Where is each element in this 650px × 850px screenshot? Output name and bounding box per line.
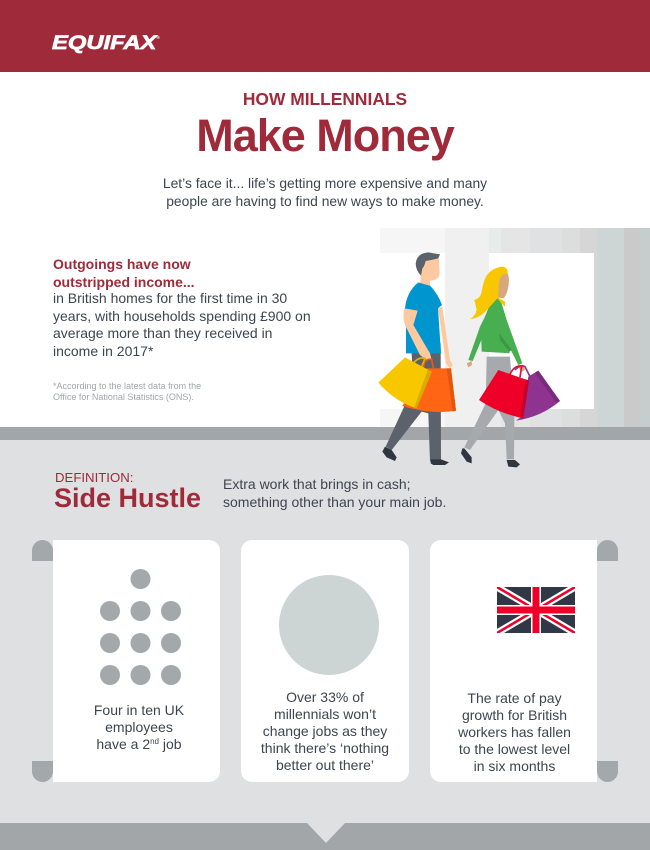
callout body: years, with households spending £900 on bbox=[53, 308, 311, 324]
footnote bbox=[53, 381, 201, 402]
dot icons bbox=[100, 569, 181, 685]
callout body: in British homes for the first time in 30 bbox=[53, 290, 287, 306]
callout text: outgoings bbox=[53, 256, 311, 359]
stat text: in six months bbox=[474, 758, 555, 774]
stat text: have a 2nd job bbox=[96, 736, 182, 752]
tab bottom bbox=[32, 761, 53, 782]
footnote: *According to the latest data from the bbox=[53, 381, 201, 391]
intro text: Let’s face it... life’s getting more expensive and many bbox=[163, 175, 487, 191]
panel: four in ten bbox=[32, 540, 220, 782]
definition term: Side Hustle bbox=[54, 483, 201, 513]
stat text: think there’s ‘nothing bbox=[261, 740, 389, 756]
stat text bbox=[94, 702, 184, 752]
stat text: growth for British bbox=[462, 707, 567, 723]
tab bottom bbox=[597, 761, 618, 782]
stat text bbox=[458, 690, 571, 774]
tab top bbox=[597, 540, 618, 561]
title block bbox=[196, 89, 454, 161]
main heading: Make Money bbox=[196, 110, 454, 161]
stat text: The rate of pay bbox=[467, 690, 562, 706]
intro text bbox=[163, 175, 487, 209]
intro text: people are having to find new ways to make money. bbox=[166, 193, 484, 209]
callout heading: Outgoings have now bbox=[53, 256, 191, 272]
pale circle bbox=[279, 575, 379, 675]
definition text bbox=[223, 476, 446, 510]
callout body: average more than they received in bbox=[53, 325, 272, 341]
kicker heading: HOW MILLENNIALS bbox=[243, 89, 407, 109]
tab top bbox=[32, 540, 53, 561]
callout heading bbox=[53, 256, 195, 290]
panel: pay growth bbox=[430, 540, 618, 782]
callout body bbox=[53, 290, 311, 359]
footnote: Office for National Statistics (ONS). bbox=[53, 392, 194, 402]
footer band bbox=[0, 823, 650, 850]
definition label: DEFINITION: bbox=[55, 470, 133, 485]
stat text: to the lowest level bbox=[459, 741, 570, 757]
stat text: change jobs as they bbox=[263, 723, 387, 739]
man's bags bbox=[378, 357, 456, 412]
header band bbox=[0, 0, 650, 72]
stat text: workers has fallen bbox=[458, 724, 571, 740]
panel: 33 percent bbox=[241, 540, 409, 782]
man bbox=[382, 252, 453, 465]
definition text: something other than your main job. bbox=[223, 494, 446, 510]
definition text: Extra work that brings in cash; bbox=[223, 476, 411, 492]
stat text: employees bbox=[105, 719, 173, 735]
callout heading: outstripped income... bbox=[53, 274, 195, 290]
icon: union flag bbox=[497, 587, 575, 633]
stat text: Over 33% of bbox=[286, 689, 364, 705]
definition block bbox=[54, 470, 446, 513]
stat text: millennials won’t bbox=[274, 706, 376, 722]
stat text: better out there’ bbox=[276, 757, 374, 773]
stat text bbox=[261, 689, 389, 773]
callout body: income in 2017* bbox=[53, 343, 153, 359]
arrow notch bbox=[307, 823, 345, 843]
woman bbox=[461, 267, 525, 467]
woman's bags bbox=[479, 366, 560, 421]
stat text: Four in ten UK bbox=[94, 702, 184, 718]
logo: Equifax: EQUIFAX® bbox=[52, 32, 160, 54]
